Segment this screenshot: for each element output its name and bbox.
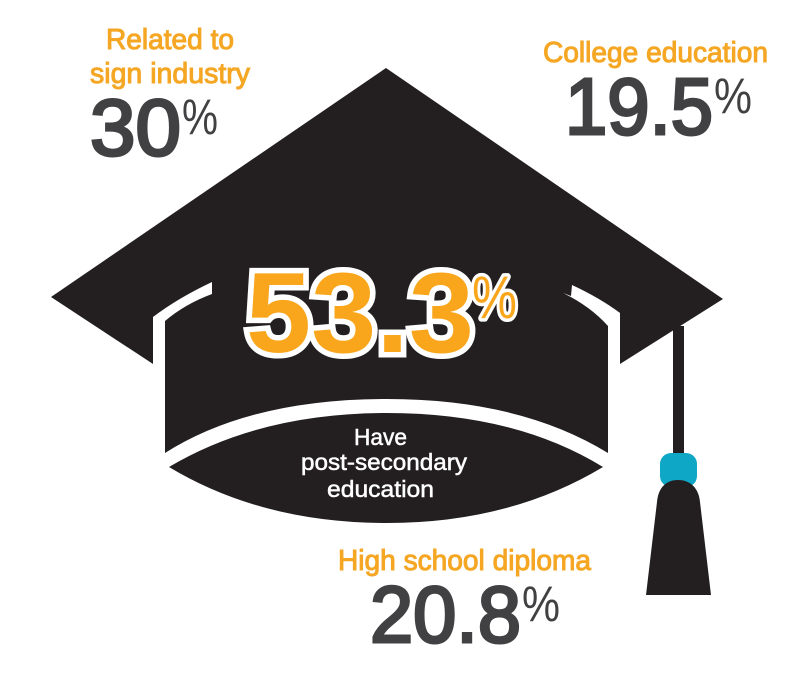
white band right [563,285,620,460]
stat: college education [543,37,768,151]
stat: sign industry: % [182,89,218,145]
stat: high school diploma: % [522,576,560,632]
icon: graduation cap [51,68,723,523]
stat: college education: College education [543,37,768,69]
caption: have post-secondary education: post-secondary [301,449,468,475]
caption: have post-secondary education: education [327,476,434,502]
tassel cord [673,326,684,458]
stat: sign industry: 30 [90,83,181,172]
icon: tassel [646,326,711,595]
cap body [165,280,608,453]
tassel knot [660,453,697,487]
stat: high school diploma: High school diploma [338,545,592,577]
tassel fringe [646,480,711,595]
stat: post-secondary headline: % [472,264,517,331]
stat: sign industry [90,24,250,172]
white band left [153,282,212,460]
stat: post-secondary headline: 53.3 [246,250,474,377]
cap board [51,68,723,364]
stat: college education: 19.5 [565,62,713,151]
caption: have post-secondary education [301,424,468,502]
stat: sign industry: Related to [106,24,234,56]
stat: high school diploma [338,545,592,659]
cap underside [169,413,603,523]
stat: college education: % [714,68,752,124]
caption: have post-secondary education: Have [354,424,407,450]
stat: high school diploma: 20.8 [370,570,521,659]
stat: sign industry: sign industry [90,58,250,90]
